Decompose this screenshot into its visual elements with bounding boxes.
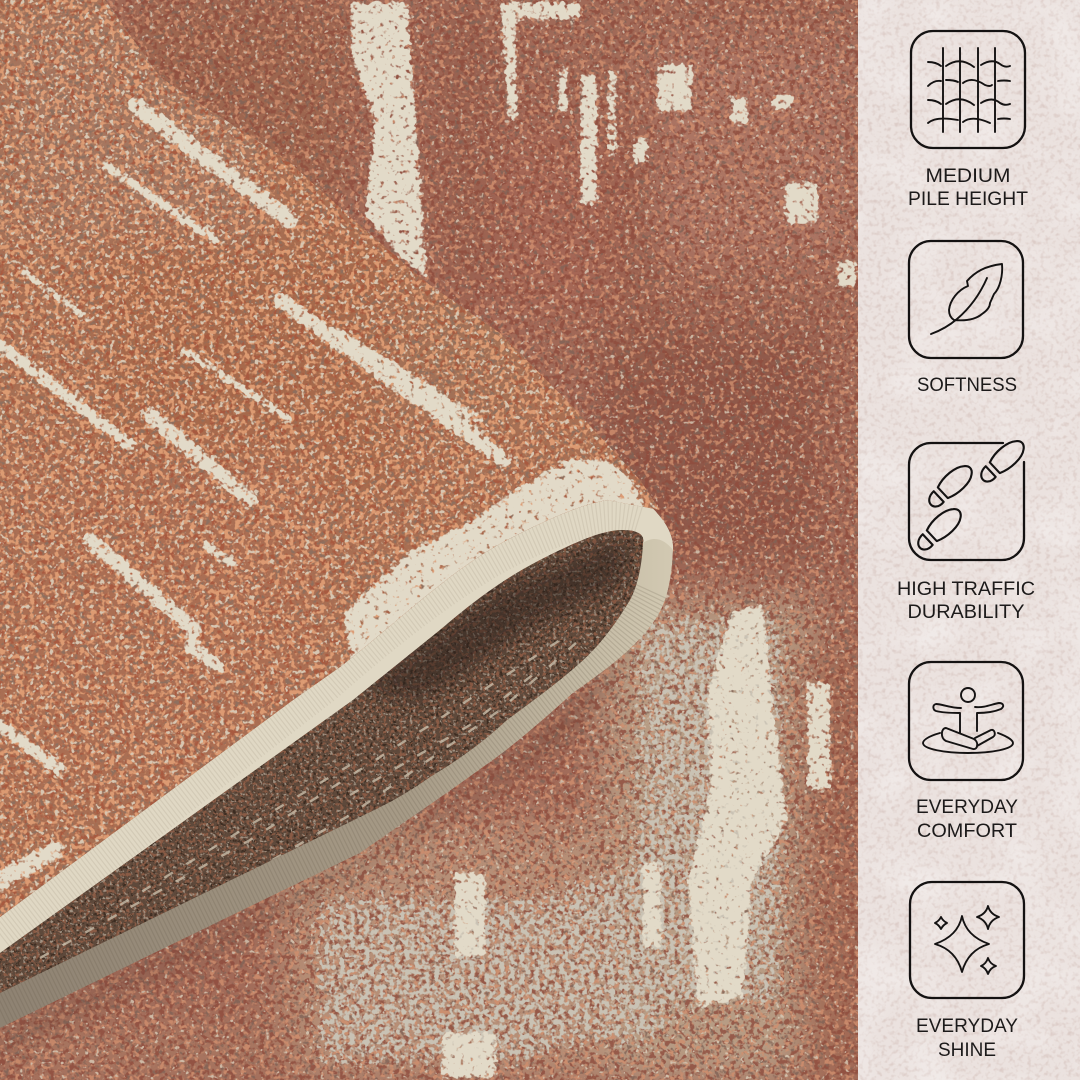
rolled rug top bbox=[0, 0, 680, 960]
icon: footprints bbox=[909, 435, 1029, 560]
label: everyday comfort: EVERYDAY bbox=[916, 797, 1018, 818]
label: high traffic durability: HIGH TRAFFIC bbox=[897, 579, 1035, 600]
label: everyday shine: SHINE bbox=[938, 1040, 996, 1061]
label: medium pile height bbox=[908, 166, 1028, 210]
photo: rolled rug corner bbox=[0, 0, 860, 1080]
label: everyday comfort: COMFORT bbox=[917, 821, 1017, 842]
cream streaks on flat rug bbox=[348, 0, 859, 1080]
label: medium pile height: PILE HEIGHT bbox=[908, 189, 1028, 210]
icon: pile weave bbox=[911, 31, 1025, 148]
label: medium pile height: MEDIUM bbox=[926, 166, 1010, 187]
feature: everyday shine bbox=[910, 882, 1024, 1061]
label: high traffic durability: DURABILITY bbox=[908, 602, 1025, 623]
rug binding edge bbox=[0, 499, 673, 1028]
grey speckled zones bbox=[300, 600, 800, 1080]
icon: seated meditation bbox=[909, 662, 1023, 780]
feature: high traffic durability bbox=[897, 435, 1035, 623]
panel: features sidebar bbox=[858, 0, 1080, 1080]
cream woven border band bbox=[340, 457, 650, 670]
label: everyday shine: EVERYDAY bbox=[916, 1016, 1018, 1037]
label: softness: SOFTNESS bbox=[917, 375, 1017, 396]
icon: feather bbox=[909, 241, 1023, 358]
label: high traffic durability bbox=[897, 579, 1035, 623]
label: everyday comfort bbox=[916, 797, 1018, 842]
rug back side bbox=[0, 530, 644, 993]
cream woven streaks bbox=[0, 105, 505, 880]
label: everyday shine bbox=[916, 1016, 1018, 1061]
feature: everyday comfort bbox=[909, 662, 1023, 842]
flat rug surface bbox=[0, 0, 860, 1080]
shadow cast under the roll bbox=[0, 640, 640, 1055]
feature: medium pile height bbox=[908, 31, 1028, 210]
feature: softness bbox=[909, 241, 1023, 396]
icon: sparkles bbox=[910, 882, 1024, 998]
